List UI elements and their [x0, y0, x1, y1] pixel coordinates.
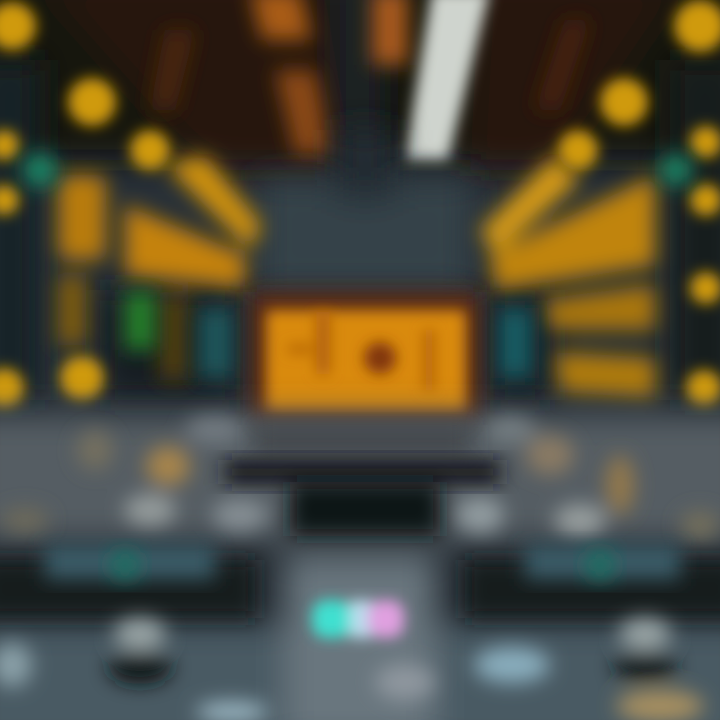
left yellow panels [58, 155, 262, 380]
teal and green indicators [23, 153, 692, 378]
central orange screen [250, 292, 480, 427]
central console: dark [225, 425, 500, 536]
side consoles: dark bands with teal screens [0, 545, 720, 618]
ceiling: white light strip [405, 0, 490, 160]
colour glow: cyan and pink [312, 600, 404, 638]
yellow lamps [0, 0, 720, 408]
side dark columns [0, 60, 720, 400]
ceiling: orange streaks [150, 0, 590, 155]
floor: warm and light highlights [1, 416, 720, 539]
lower buttons and pads [0, 618, 704, 720]
floor: grey base [0, 415, 720, 720]
centre wall: slate [260, 130, 470, 290]
ceiling: dark brown [0, 0, 720, 180]
right yellow panels [480, 155, 655, 398]
